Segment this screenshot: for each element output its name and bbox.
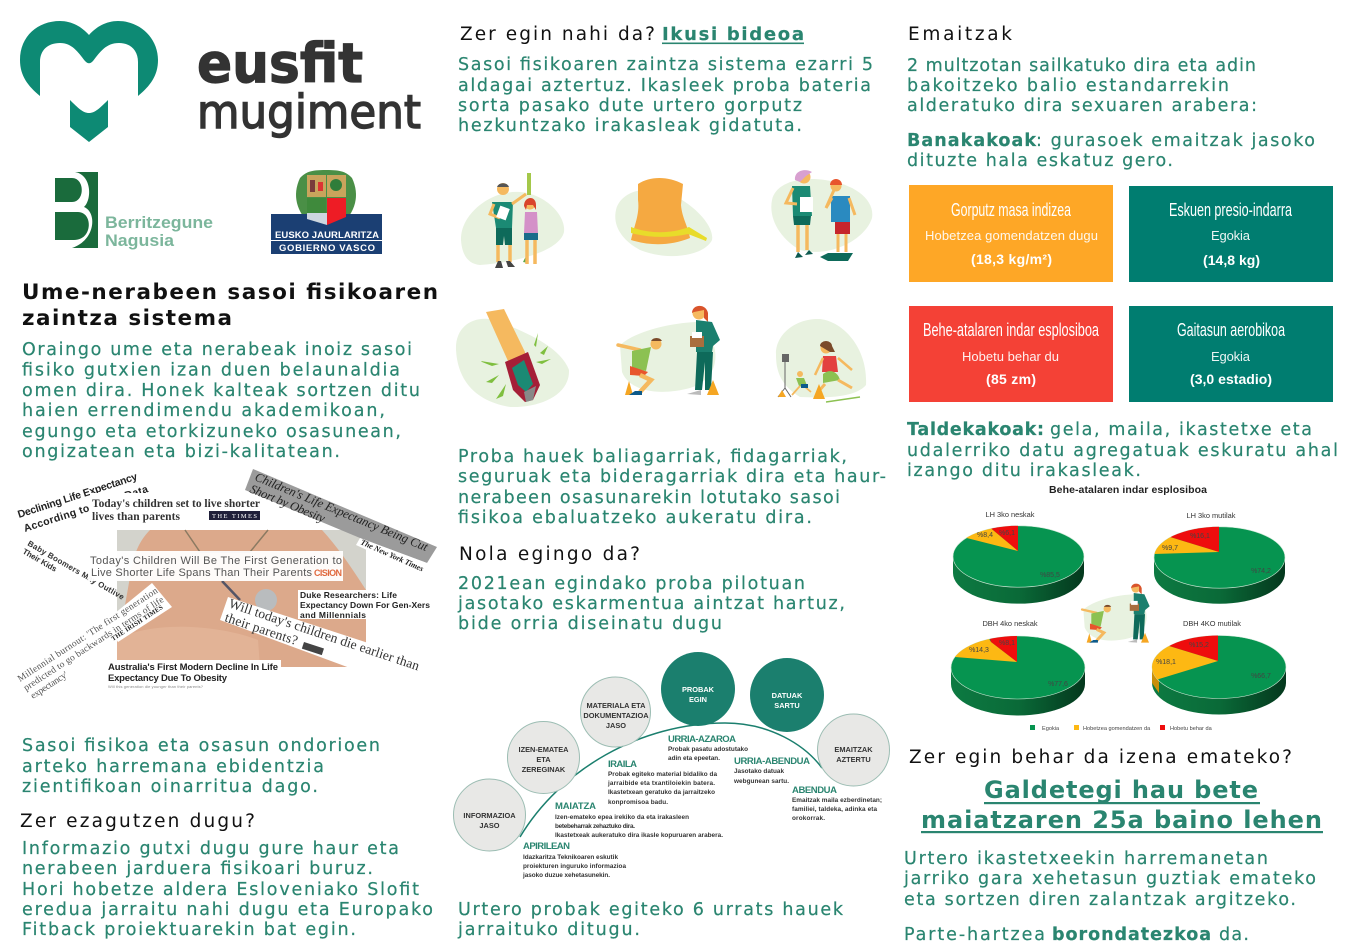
heading: Zer ezagutzen dugu: Zer ezagutzen dugu?: [20, 811, 255, 832]
headline: Irish Times: predicted to go backwards in terms of life: [22, 594, 166, 694]
text block: six steps: [457, 900, 844, 940]
headline: BBC: their parents?: [223, 610, 300, 648]
headline: Cision: [88, 551, 343, 581]
illustration: height measurement: [461, 173, 564, 268]
illustration: waist measurement: [615, 178, 712, 256]
text block: what we know: eredua jarraitu nahi dugu eta Europako: [22, 900, 433, 920]
title: zaintza sistema: [22, 306, 232, 331]
text block: what we know: Fitback proiektuarekin bat egin.: [22, 920, 356, 940]
milestone: apirilean: APIRILEAN: [523, 841, 570, 852]
headline: Cision: Today's Children Will Be The First Generation to: [90, 555, 342, 567]
pie: DBH 4ko neskak: %14,3: [969, 647, 989, 654]
text block: what we know: nerabeen jarduera fisikoari buruz.: [22, 859, 373, 879]
step circle: probak: EGIN: [689, 695, 707, 704]
text block: contact: jarriko gara xehetasun guztiak emateko: [903, 869, 1316, 889]
link: questionnaire: Galdetegi hau bete: [984, 776, 1258, 804]
pie: LH 3ko neskak: LH 3ko neskak: [986, 510, 1035, 519]
text block: voluntary: [904, 925, 1249, 945]
pie: LH 3ko mutilak: [1145, 511, 1285, 604]
text block: tests are valid: Proba hauek baliagarriak, fidagarriak,: [458, 447, 847, 467]
card: aerobic capacity: Gaitasun aerobikoa: [1177, 320, 1286, 340]
logo: eusfit mugiment: [20, 21, 421, 142]
text block: intro: [22, 340, 420, 462]
logo: Berritzegune Nagusia: Nagusia: [105, 231, 175, 250]
milestone: urria-azaroa: [668, 734, 748, 762]
text block: tests are valid: seguruak eta bideragarriak dira eta haur-: [458, 467, 886, 487]
headline: New York Times: The New York Times: [359, 538, 425, 573]
headline: Declining life expectancy: Declining Life Expectancy: [16, 471, 139, 521]
step circle: emaitzak: EMAITZAK: [834, 745, 873, 754]
headline: The Times: Today's children set to live shorter: [92, 498, 260, 510]
headline: Irish Times: THE IRISH TIMES: [110, 604, 165, 643]
text block: tests are valid: nerabeen osasunarekin lotutako sasoi: [458, 488, 840, 508]
step circle: izen-ematea: ZEREGINAK: [522, 765, 566, 774]
pie: LH 3ko neskak: [953, 510, 1084, 604]
heading: Emaitzak: Emaitzak: [908, 24, 1012, 45]
text block: intro: egungo eta etorkizuneko osasunean,: [22, 422, 401, 442]
card: aerobic capacity: [1129, 306, 1333, 402]
text block: evidence: zientifikoan oinarritua dago.: [22, 777, 318, 797]
logo: Berritzegune Nagusia: Berritzegune: [105, 213, 213, 232]
milestone: urria-azaroa: Probak pasatu adostutako: [668, 746, 748, 753]
text block: groups: [907, 420, 1338, 481]
roadmap diagram: [454, 652, 890, 879]
pie: LH 3ko neskak: %6,1: [999, 530, 1015, 537]
chart title: Behe-atalaren indar esplosiboa: [1049, 484, 1207, 496]
pie: LH 3ko mutilak: %74,2: [1251, 568, 1271, 575]
text block: groups: Taldekakoak:: [907, 420, 1044, 440]
text block: what we know: Informazio gutxi dugu gure haur eta: [22, 839, 399, 859]
pie: DBH 4KO mutilak: [1140, 619, 1286, 715]
logo: Eusko Jaurlaritza: [271, 170, 382, 254]
text block: voluntary: da.: [1219, 925, 1249, 945]
text block: contact: [903, 849, 1316, 910]
text block: groups: gela, maila, ikastetxe eta: [1050, 420, 1312, 440]
logo: Eusko Jaurlaritza: GOBIERNO VASCO: [279, 243, 375, 254]
text block: how: 2021ean egindako proba pilotuan: [458, 574, 805, 594]
step circle: informazioa: JASO: [479, 821, 500, 830]
text block: individual: [907, 131, 1315, 171]
logo: Eusko Jaurlaritza: EUSKO JAURLARITZA: [275, 230, 379, 241]
logo wordmark: [197, 32, 421, 139]
pie: DBH 4ko neskak: %8,1: [999, 640, 1015, 647]
milestone: maiatza: Izen-emateko epea irekiko da eta irakasleen: [555, 814, 689, 821]
milestone: iraila: konpromisoa badu.: [608, 799, 668, 806]
step circle: materiala: JASO: [606, 721, 626, 730]
step circle: izen-ematea: ETA: [536, 755, 551, 764]
milestone: abendua: orokorrak.: [792, 815, 825, 822]
text block: six steps: Urtero probak egiteko 6 urrats hauek: [458, 900, 844, 920]
milestone: maiatza: betebeharrak zehaztuko dira.: [555, 823, 635, 830]
photo: child with stethoscope: [117, 530, 366, 667]
text block: what we know: [22, 839, 433, 940]
milestone: iraila: Ikastetxean geratuko da jarraitzeko: [608, 789, 715, 796]
icon: heart M mark: [20, 21, 158, 142]
text block: tests are valid: [458, 447, 886, 528]
text block: evidence: [22, 736, 380, 797]
card: lower body strength: Behe-atalaren indar esplosiboa: [923, 320, 1100, 340]
text block: voluntary: borondatezkoa: [1052, 925, 1211, 945]
milestone: abendua: [792, 785, 882, 822]
text block: results: bakoitzeko balio estandarrekin: [907, 76, 1229, 96]
step circle: materiala: MATERIALA ETA: [587, 701, 646, 710]
text block: intro: Oraingo ume eta nerabeak inoiz sasoi: [22, 340, 412, 360]
text block: intro: ongizatean eta bizi-kalitatean.: [22, 442, 340, 462]
pie: LH 3ko neskak: %8,4: [977, 532, 993, 539]
step circle: materiala: DOKUMENTAZIOA: [583, 711, 649, 720]
text block: what to do: sorta pasako dute urtero gorputz: [458, 96, 802, 116]
milestone: urria-azaroa: URRIA-AZAROA: [668, 734, 736, 745]
headline: Declining life expectancy: According to NCHS Data: [22, 483, 150, 535]
card: grip strength: [1129, 186, 1333, 282]
text block: individual: : gurasoek emaitzak jasoko: [1036, 131, 1315, 151]
headline: Duke: Duke Researchers: Life: [300, 590, 397, 600]
step circle: probak: PROBAK: [682, 685, 715, 694]
text block: voluntary: Parte-hartzea: [904, 925, 1045, 945]
milestone: apirilean: proiekturen inguruko informazioa: [523, 863, 626, 870]
text block: how: jasotako eskarmentua aintzat hartuz,: [457, 594, 845, 614]
headline: Baby Boomers: Their Kids: [21, 547, 59, 574]
pie: DBH 4KO mutilak: %18,1: [1156, 659, 1176, 666]
text block: how: [457, 574, 845, 634]
text block: what to do: Sasoi fisikoaren zaintza sistema ezarri 5: [458, 55, 873, 75]
milestone: abendua: familiei, taldeka, adinka eta: [792, 806, 877, 813]
pie: DBH 4KO mutilak: %66,7: [1251, 673, 1271, 680]
headline: The Times: THE TIMES: [212, 513, 257, 520]
text block: contact: eta sortzen diren zalantzak argitzeko.: [904, 890, 1296, 910]
illustration: standing long jump: [618, 306, 720, 395]
headline: The Times: lives than parents: [92, 511, 181, 523]
pie: DBH 4ko neskak: %77,6: [1048, 681, 1068, 688]
step circle: probak: [661, 652, 735, 726]
card: grip strength: (14,8 kg): [1203, 252, 1260, 268]
text block: what to do: aldagai aztertuz. Ikasleek proba bateria: [458, 76, 871, 96]
pie: DBH 4KO mutilak: %15,2: [1189, 642, 1209, 649]
headline: Australia: [105, 660, 281, 690]
pie: LH 3ko mutilak: %16,1: [1190, 533, 1210, 540]
text block: evidence: arteko harremana ebidentzia: [22, 757, 324, 777]
headline: The Times: [90, 493, 262, 524]
headline: New York Times: Children's Life Expectancy Being Cut: [253, 470, 431, 554]
milestone: iraila: jarraibide eta txantiloiekin batera.: [607, 780, 715, 787]
text block: results: alderatuko dira sexuaren arabera:: [907, 96, 1257, 116]
milestone: apirilean: jasoko duzue xehetasunekin.: [522, 872, 610, 879]
card: body mass index: Hobetzea gomendatzen dugu: [925, 228, 1098, 243]
milestone: urria-abendua: [733, 756, 810, 785]
title: Ume-nerabeen sasoi fisikoaren: [22, 280, 438, 305]
card: body mass index: Gorputz masa indizea: [951, 200, 1072, 220]
milestone: urria-azaroa: adin eta epeetan.: [668, 755, 720, 762]
card: lower body strength: Hobetu behar du: [962, 349, 1059, 364]
headline: Cision: Live Shorter Life Spans Than Their Parents: [91, 567, 312, 579]
logo wordmark: eusfit: [197, 32, 363, 95]
headline: Duke: Expectancy Down For Gen-Xers: [300, 600, 430, 610]
chart: lower body strength pies: [940, 484, 1286, 732]
card: lower body strength: (85 zm): [986, 371, 1036, 387]
headline: BBC: Will today's children die earlier than: [227, 596, 422, 673]
chart legend: Egokia: [1042, 726, 1060, 732]
headline: Duke: and Millennials: [300, 610, 366, 620]
title: [22, 280, 438, 331]
logo wordmark: mugiment: [197, 85, 421, 139]
headline: Australia: Expectancy Due To Obesity: [108, 673, 228, 684]
milestone: maiatza: MAIATZA: [555, 801, 596, 812]
milestone: urria-abendua: Jasotako datuak: [734, 768, 784, 775]
step circle: materiala: [580, 677, 650, 747]
card: aerobic capacity: Egokia: [1211, 349, 1251, 364]
milestone: urria-abendua: URRIA-ABENDUA: [734, 756, 810, 767]
headline: Australia: Australia's First Modern Decline In Life: [108, 662, 278, 673]
headline: Australia: Will this generation die younger than their parents?: [108, 684, 204, 689]
text block: six steps: jarraituko ditugu.: [457, 920, 640, 940]
headline: Cision: CISION: [314, 568, 342, 578]
text block: intro: haien errendimendu akademikoan,: [22, 401, 385, 421]
chart legend: Hobetu behar da: [1170, 726, 1213, 732]
text block: results: 2 multzotan sailkatuko dira eta adin: [907, 56, 1256, 76]
card: aerobic capacity: (3,0 estadio): [1190, 371, 1272, 387]
heading: how to register: Zer egin behar da izena emateko?: [909, 747, 1292, 768]
headline collage: [16, 469, 437, 702]
step circle: datuak: DATUAK: [772, 691, 803, 700]
milestone: iraila: IRAILA: [608, 759, 637, 770]
milestone: apirilean: [522, 841, 626, 879]
milestone: iraila: [607, 759, 717, 806]
illustration: shuttle run: [776, 319, 866, 402]
text block: results: [907, 56, 1257, 116]
heading: Zer egin nahi da: Ikusi bideoa: [662, 24, 804, 45]
step circle: datuak: [750, 658, 824, 732]
headline: Baby Boomers: Baby Boomers May Outlive: [26, 539, 126, 602]
link: questionnaire: maiatzaren 25a baino lehen: [921, 806, 1322, 834]
pie: DBH 4ko neskak: [940, 619, 1085, 715]
illustration: grip dynamometer: [456, 309, 569, 407]
step circle: informazioa: [454, 779, 526, 851]
text block: individual: Banakakoak: [907, 131, 1036, 151]
pie: DBH 4KO mutilak: DBH 4KO mutilak: [1183, 619, 1241, 628]
step circle: datuak: SARTU: [774, 701, 800, 710]
text block: contact: Urtero ikastetxeekin harremanetan: [904, 849, 1268, 869]
heading: Zer egin nahi da: Zer egin nahi da?: [460, 24, 655, 45]
milestone: abendua: Emaitzak maila ezberdinetan;: [792, 797, 882, 804]
text block: groups: udalerriko datu agregatuak eskuratu ahal: [907, 441, 1338, 461]
headline: Duke: [298, 590, 430, 620]
step circle: emaitzak: AZTERTU: [836, 755, 871, 764]
step circle: izen-ematea: IZEN-EMATEA: [519, 745, 569, 754]
pie: LH 3ko mutilak: %9,7: [1162, 545, 1178, 552]
text block: tests are valid: fisikoa ebaluatzeko aukeratu dira.: [458, 508, 812, 528]
roadmap curve: [520, 723, 822, 837]
chart legend: Hobetzea gomendatzen da: [1083, 726, 1151, 732]
headline: Irish Times: Millennial burnout: 'The first generation: [16, 585, 160, 685]
milestone: maiatza: Ikastetxeak aukeratuko dira ikasle kopuruaren arabera.: [555, 832, 723, 839]
card: grip strength: Egokia: [1211, 228, 1251, 243]
chart legend: [1030, 725, 1213, 732]
logo: Berritzegune Nagusia: [55, 172, 213, 250]
heading: Nola egingo da: Nola egingo da?: [459, 544, 640, 565]
pie: LH 3ko mutilak: LH 3ko mutilak: [1187, 511, 1236, 520]
text block: intro: omen dira. Honek kalteak sortzen ditu: [22, 381, 420, 401]
card: grip strength: Eskuen presio-indarra: [1169, 200, 1293, 220]
text block: evidence: Sasoi fisikoa eta osasun ondorioen: [22, 736, 380, 756]
illustration: weighing: [771, 170, 872, 261]
card: lower body strength: [909, 306, 1113, 402]
pie: LH 3ko neskak: %85,5: [1040, 572, 1060, 579]
milestone: abendua: ABENDUA: [792, 785, 837, 796]
illustration: jump mini: [1082, 584, 1150, 643]
milestone: maiatza: [555, 801, 723, 839]
step circle: informazioa: INFORMAZIOA: [463, 811, 516, 820]
text block: what to do: hezkuntzako irakasleak gidatuta.: [458, 116, 802, 136]
pie: DBH 4ko neskak: DBH 4ko neskak: [982, 619, 1038, 628]
text block: individual: dituzte hala eskatuz gero.: [907, 151, 1173, 171]
text block: how: bide orria diseinatu dugu: [458, 614, 722, 634]
card: body mass index: (18,3 kg/m²): [971, 251, 1052, 267]
link: questionnaire: [921, 776, 1323, 834]
headline: New York Times: Short by Obesity: [248, 482, 328, 526]
step circle: izen-ematea: [508, 722, 580, 794]
milestone: apirilean: Idazkaritza Teknikoaren eskutik: [523, 854, 618, 861]
headline: Irish Times: expectancy': [29, 670, 70, 702]
milestone: urria-abendua: webgunean sartu.: [733, 778, 789, 785]
step circle: emaitzak: [818, 714, 890, 786]
text block: groups: izango ditu irakasleak.: [907, 461, 1141, 481]
text block: what we know: Hori hobetze aldera Esloveniako Slofit: [22, 880, 419, 900]
text block: intro: fisiko gutxien izan duen belaunaldia: [22, 360, 400, 380]
text block: what to do: [458, 55, 873, 136]
heading: Zer egin nahi da: [460, 24, 804, 45]
milestone: iraila: Probak egiteko material bidaliko da: [608, 771, 717, 778]
card: body mass index: [909, 185, 1113, 282]
